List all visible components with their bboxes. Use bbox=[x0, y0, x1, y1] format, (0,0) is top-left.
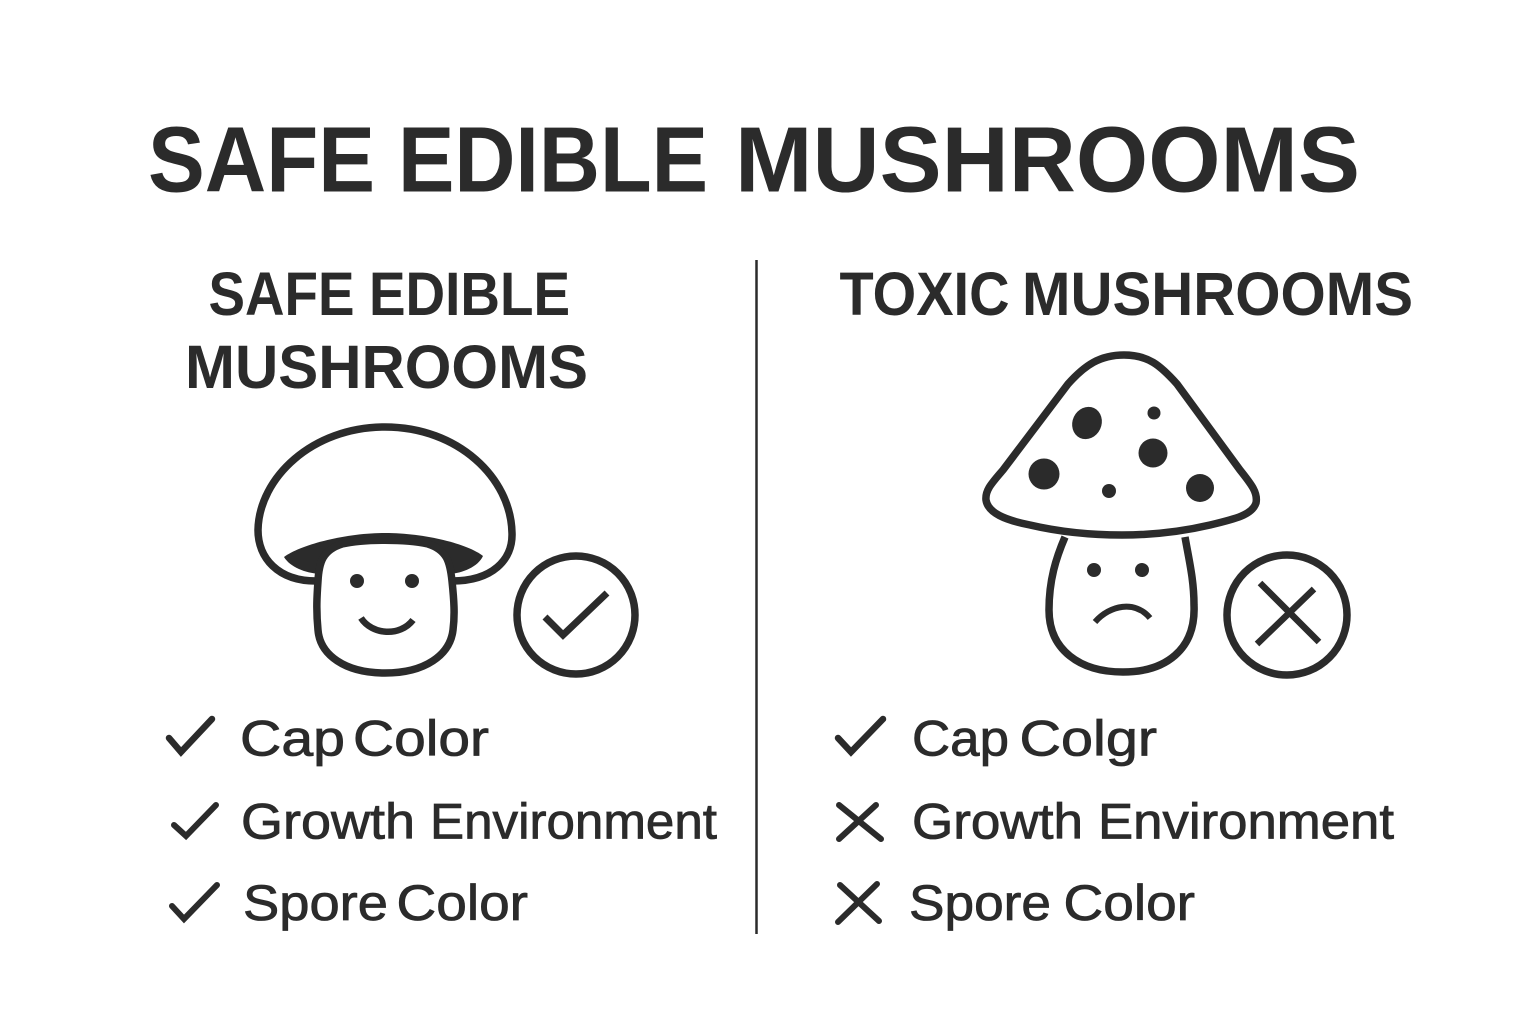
label: spore color bbox=[909, 875, 1195, 931]
label: cap color: Colgr bbox=[1020, 710, 1157, 766]
panel: safe edible mushrooms bbox=[169, 260, 717, 931]
label: growth environment: Growth bbox=[912, 794, 1083, 850]
toxic panel heading: MUSHROOMS bbox=[1022, 260, 1413, 328]
safe panel heading: EDIBLE bbox=[369, 260, 570, 328]
icon: check bbox=[172, 885, 217, 919]
criterion: cap color bbox=[838, 710, 1157, 766]
toxic panel heading: TOXIC bbox=[840, 260, 1010, 328]
icon: check bbox=[838, 719, 883, 752]
center divider bbox=[755, 260, 758, 934]
toxic panel heading bbox=[840, 260, 1413, 328]
criterion: spore color bbox=[838, 875, 1195, 931]
title: EDIBLE bbox=[398, 108, 708, 212]
label: spore color: Color bbox=[1064, 875, 1195, 931]
criterion: spore color bbox=[172, 875, 528, 931]
label: cap color: Color bbox=[353, 710, 489, 766]
safe panel heading: MUSHROOMS bbox=[185, 333, 588, 401]
title: SAFE bbox=[148, 108, 375, 212]
label: growth environment bbox=[912, 794, 1394, 850]
label: growth environment bbox=[241, 794, 717, 850]
label: growth environment: Growth bbox=[241, 794, 415, 850]
icon: sad spotted mushroom bbox=[986, 355, 1256, 672]
title bbox=[148, 108, 1360, 212]
safe panel heading bbox=[185, 260, 588, 401]
label: spore color bbox=[243, 875, 528, 931]
label: cap color bbox=[240, 710, 489, 766]
criterion: growth environment bbox=[174, 794, 717, 850]
criterion: growth environment bbox=[839, 794, 1394, 850]
label: growth environment: Environment bbox=[430, 794, 717, 850]
icon: cross badge bbox=[1227, 555, 1347, 675]
label: spore color: Spore bbox=[909, 875, 1051, 931]
icon: check badge bbox=[517, 556, 635, 674]
safe panel heading: SAFE bbox=[208, 260, 354, 328]
label: cap color bbox=[912, 710, 1157, 766]
icon: smiling mushroom bbox=[258, 427, 512, 673]
label: growth environment: Environment bbox=[1098, 794, 1394, 850]
icon: check bbox=[169, 719, 212, 752]
icon: cross bbox=[839, 805, 881, 839]
icon: cross bbox=[838, 884, 879, 922]
label: spore color: Color bbox=[396, 875, 528, 931]
criterion: cap color bbox=[169, 710, 489, 766]
label: cap color: Cap bbox=[912, 710, 1009, 766]
title: MUSHROOMS bbox=[735, 108, 1360, 212]
panel: toxic mushrooms bbox=[838, 260, 1413, 931]
label: spore color: Spore bbox=[243, 875, 388, 931]
icon: check bbox=[174, 805, 216, 836]
label: cap color: Cap bbox=[240, 710, 345, 766]
